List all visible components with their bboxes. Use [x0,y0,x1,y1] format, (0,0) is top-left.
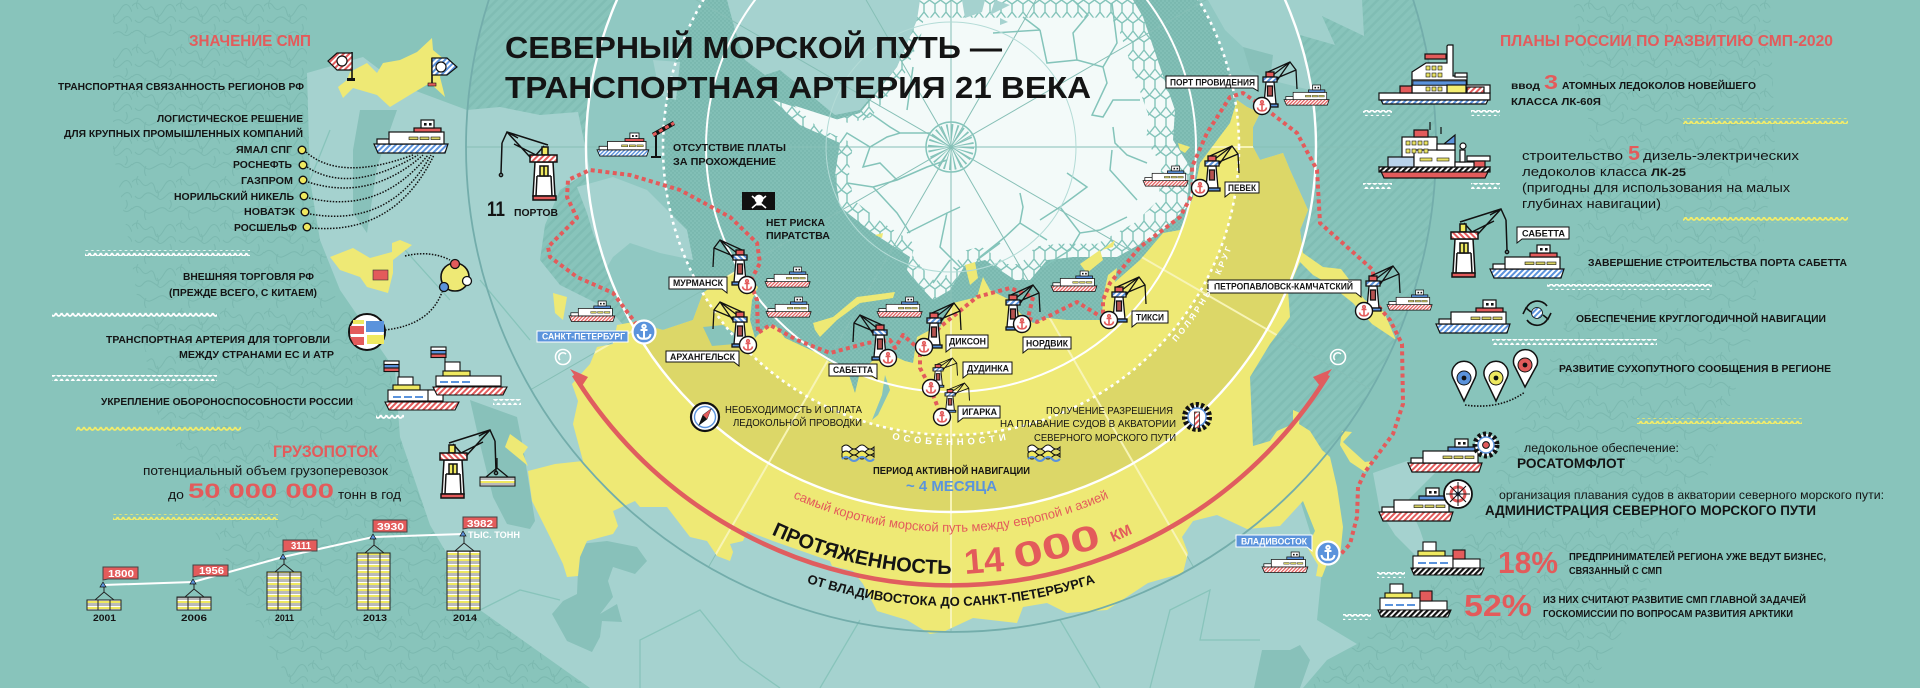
panel: cargo flow: потенциальный объем грузоперевозок [143,463,388,478]
item: logistic solution [64,113,448,234]
item: EU-APR artery [106,314,385,361]
plan: NSR administration: АДМИНИСТРАЦИЯ СЕВЕРНОГО МОРСКОГО ПУТИ [1485,503,1816,518]
plan: nuclear icebreakers: ввод [1511,80,1540,92]
port: Санкт-Петербург: САНКТ-ПЕТЕРБУРГ [542,332,626,342]
port: Певек [1192,146,1259,197]
chart: cargo volume by year [87,517,520,624]
ocean texture right [1303,0,1775,688]
panel: cargo flow: тонн в год [338,487,401,502]
plan: year-round navigation [1436,300,1826,333]
plan: NSR administration: организация плавания судов в акватории северного морского пути: [1499,488,1884,502]
plan: diesel icebreakers: ледоколов класса [1522,164,1648,179]
curved label: shortest route: самый короткий морской путь между европой и азией [794,490,1108,535]
chart: cargo volume by year: 2001 [93,613,117,624]
port: Владивосток: ВЛАДИВОСТОК [1241,536,1307,548]
port: Игарка [934,383,1000,426]
divider wave [113,514,278,520]
item: logistic solution: ГАЗПРОМ [241,175,293,187]
plan: diesel icebreakers: 5 [1628,143,1640,165]
chart: cargo volume by year: 2011 [275,613,295,624]
port: Тикси [1100,277,1168,328]
chart: cargo volume by year: 1800 [108,569,135,580]
plan: diesel icebreakers [1363,122,1800,211]
russia landmass [528,100,1396,634]
port: Архангельск [666,302,756,366]
chart: cargo volume by year: 1956 [199,566,224,577]
plan: nuclear icebreakers: 3 [1544,72,1558,94]
port: Петропавловск-Камчатский [1208,266,1400,320]
item: logistic solution: ЯМАЛ СПГ [236,144,292,156]
panel: 11 ports: 11 [487,198,505,221]
plan: diesel icebreakers: глубинах навигации) [1522,196,1661,211]
panel: no passage fee: ОТСУТСТВИЕ ПЛАТЫ [673,142,786,154]
plan: nuclear icebreakers [1363,45,1756,116]
panel: no piracy: НЕТ РИСКА [766,217,825,229]
land: europe, asia [307,57,1357,688]
feature: permit [1000,405,1209,444]
port: Диксон [916,303,988,356]
panel: no piracy: ПИРАТСТВА [766,230,830,242]
port: Петропавловск-Камчатский: ПЕТРОПАВЛОВСК-КАМЧАТСКИЙ [1214,280,1353,292]
land: scandinavia [577,177,693,267]
title: ТРАНСПОРТНАЯ АРТЕРИЯ 21 ВЕКА [505,70,1091,105]
port: Владивосток [1236,535,1340,564]
polar stereographic circles [466,0,1436,632]
plan: land connections [1452,350,1831,406]
panel: 11 ports: ПОРТОВ [514,207,558,219]
stat: 52 percent: ГОСКОМИССИИ ПО ВОПРОСАМ РАЗВИТИЯ АРКТИКИ [1543,608,1793,620]
plan: Sabetta port: САБЕТТА [1522,228,1565,240]
icon: route end left [556,350,570,364]
port: Нордвик [1006,285,1071,353]
chart: cargo volume by year: 2013 [363,613,387,624]
stat: 52 percent: ИЗ НИХ СЧИТАЮТ РАЗВИТИЕ СМП ГЛАВНОЙ ЗАДАЧЕЙ [1543,593,1806,606]
feature: icebreaker escort [691,403,862,431]
port: Провидения: ПОРТ ПРОВИДЕНИЯ [1170,78,1255,88]
plan: diesel icebreakers: дизель-электрических [1643,148,1800,163]
arctic shelf stipple [663,0,1239,435]
icon: cargo crane [440,430,515,498]
plan: Sabetta port [1451,209,1847,278]
divider wave [1547,284,1712,290]
port: Певек: ПЕВЕК [1228,183,1256,194]
feature: icebreaker escort: НЕОБХОДИМОСТЬ И ОПЛАТА [725,404,862,416]
curved label: length heading: ПРОТЯЖЕННОСТЬ [772,522,951,574]
item: defense [101,347,521,420]
divider wave [1683,217,1848,223]
panel: cargo flow: 50 000 000 [188,480,334,503]
item: logistic solution: ДЛЯ КРУПНЫХ ПРОМЫШЛЕННЫХ КОМПАНИЙ [64,127,303,140]
chart: cargo volume by year: 3982 [467,519,494,530]
port: Нордвик: НОРДВИК [1026,338,1068,350]
chart: cargo volume by year: 2006 [181,613,207,624]
rivers and white sea [703,325,890,420]
label: polar circle: ПОЛЯРНЫЙ КРУГ [1172,246,1230,342]
inland seas [353,47,1310,688]
plan: diesel icebreakers: (пригодны для использования на малых [1522,180,1791,195]
ice cracks [840,0,1147,283]
chart: cargo volume by year: 3930 [377,522,405,533]
port: Сабетта [829,315,896,379]
feature: permit: СЕВЕРНОГО МОРСКОГО ПУТИ [1034,432,1176,444]
divider wave [52,312,217,318]
item: foreign trade: (ПРЕЖДЕ ВСЕГО, С КИТАЕМ) [169,287,317,299]
land: canada and greenland [653,0,925,115]
chart ring hatching [526,0,1376,572]
ocean texture left [113,0,590,688]
feature: navigation period: ПЕРИОД АКТИВНОЙ НАВИГАЦИИ [873,464,1030,477]
long red arrow arc [570,369,1332,585]
port: Санкт-Петербург [537,320,656,344]
panel: no passage fee [597,123,786,168]
item: logistic solution: НОВАТЭК [244,206,296,218]
port: Тикси: ТИКСИ [1136,312,1164,324]
plan: NSR administration [1379,480,1884,521]
curved number: 14 000: 000 [1009,517,1104,577]
grid meridians [466,0,1436,632]
plan: year-round navigation: ОБЕСПЕЧЕНИЕ КРУГЛОГОДИЧНОЙ НАВИГАЦИИ [1576,312,1826,325]
port: Мурманск [669,240,756,294]
item: regional connectivity: ТРАНСПОРТНАЯ СВЯЗАННОСТЬ РЕГИОНОВ РФ [58,81,304,93]
port: Провидения [1166,62,1297,114]
curved unit: km: КМ [1110,524,1132,542]
panel: 11 ports [487,132,558,221]
map ships [569,85,1432,572]
feature: permit: НА ПЛАВАНИЕ СУДОВ В АКВАТОРИИ [1000,418,1176,430]
feature: navigation period: ~ 4 МЕСЯЦА [906,478,997,495]
port: Сабетта: САБЕТТА [833,365,873,376]
item: logistic solution: ЛОГИСТИЧЕСКОЕ РЕШЕНИЕ [157,113,303,125]
feature: permit: ПОЛУЧЕНИЕ РАЗРЕШЕНИЯ [1046,405,1173,417]
divider wave [85,250,250,256]
stat: 18 percent: ПРЕДПРИНИМАТЕЛЕЙ РЕГИОНА УЖЕ ВЕДУТ БИЗНЕС, [1569,550,1826,563]
chart: cargo volume by year: 3111 [291,541,311,552]
curved number: 14 000: 14 [963,540,1006,582]
plan: Rosatomflot: ледокольное обеспечение: [1524,441,1679,455]
port: Дудинка [922,358,1012,396]
stat: 52 percent [1343,584,1806,623]
sea route, dotted [548,93,1403,555]
right heading: plans: ПЛАНЫ РОССИИ ПО РАЗВИТИЮ СМП-2020 [1500,33,1833,50]
plan: diesel icebreakers: строительство [1522,148,1623,163]
stat: 18 percent: 18% [1498,545,1558,580]
item: logistic solution: РОСШЕЛЬФ [234,222,297,234]
port: Дудинка: ДУДИНКА [967,364,1009,374]
title: СЕВЕРНЫЙ МОРСКОЙ ПУТЬ — [505,29,1002,65]
port: Диксон: ДИКСОН [949,336,986,348]
label: features: ОСОБЕННОСТИ [892,433,1006,445]
divider wave [1492,339,1657,345]
ice field cell edge [773,0,1190,300]
port: Мурманск: МУРМАНСК [673,278,723,289]
plan: Rosatomflot [1408,434,1679,472]
stat: 18 percent [1377,542,1826,580]
stat: 18 percent: СВЯЗАННЫЙ С СМП [1569,564,1662,577]
left heading: importance: ЗНАЧЕНИЕ СМП [189,33,311,50]
title [505,29,1091,105]
meridians over russia [594,146,1278,629]
panel: no piracy [742,192,830,242]
chart: cargo volume by year: ТЫС. ТОНН [468,530,520,540]
item: regional connectivity [58,38,457,107]
icon: route end right [1330,350,1346,364]
stat: 52 percent: 52% [1464,588,1532,623]
plan: diesel icebreakers: ЛК-25 [1651,167,1686,179]
divider wave [1637,418,1802,424]
panel: cargo flow: до [168,487,184,502]
arctic islands [505,143,1373,472]
item: foreign trade [169,240,472,330]
feature: icebreaker escort: ЛЕДОКОЛЬНОЙ ПРОВОДКИ [733,416,862,429]
plan: nuclear icebreakers: КЛАССА ЛК-60Я [1511,96,1601,108]
item: foreign trade: ВНЕШНЯЯ ТОРГОВЛЯ РФ [183,271,314,283]
islands in ice [962,0,1010,25]
divider wave [1683,118,1848,124]
item: logistic solution: РОСНЕФТЬ [233,159,292,171]
port: Архангельск: АРХАНГЕЛЬСК [670,352,735,363]
borders on land [310,130,1260,688]
item: EU-APR artery: ТРАНСПОРТНАЯ АРТЕРИЯ ДЛЯ ТОРГОВЛИ [106,334,330,346]
plan: land connections: РАЗВИТИЕ СУХОПУТНОГО СООБЩЕНИЯ В РЕГИОНЕ [1559,363,1831,375]
panel: no passage fee: ЗА ПРОХОЖДЕНИЕ [673,156,776,168]
polar band dark yellow [632,100,1308,511]
curved label: from Vladivostok: ОТ ВЛАДИВОСТОКА ДО САНКТ-ПЕТЕРБУРГА [808,575,1096,609]
plan: Sabetta port: ЗАВЕРШЕНИЕ СТРОИТЕЛЬСТВА ПОРТА САБЕТТА [1588,257,1847,269]
land: japan [1373,461,1437,563]
divider wave [76,426,241,432]
panel: cargo flow: ГРУЗОПОТОК [273,442,379,461]
plan: Rosatomflot: РОСАТОМФЛОТ [1517,456,1626,471]
curved number: 14 000 [963,517,1104,582]
land: alaska [1208,0,1364,90]
polar ring tint [586,0,1316,512]
port: Игарка: ИГАРКА [962,407,997,418]
feature: navigation period [842,445,1060,495]
item: EU-APR artery: МЕЖДУ СТРАНАМИ ЕС И АТР [179,349,334,361]
divider wave [52,375,217,381]
item: logistic solution: НОРИЛЬСКИЙ НИКЕЛЬ [174,190,294,203]
plan: nuclear icebreakers: АТОМНЫХ ЛЕДОКОЛОВ НОВЕЙШЕГО [1562,79,1756,92]
chart: cargo volume by year: 2014 [453,613,478,624]
ice field [794,18,1161,282]
item: defense: УКРЕПЛЕНИЕ ОБОРОНОСПОСОБНОСТИ РОССИИ [101,396,353,408]
panel: cargo flow [143,442,401,503]
